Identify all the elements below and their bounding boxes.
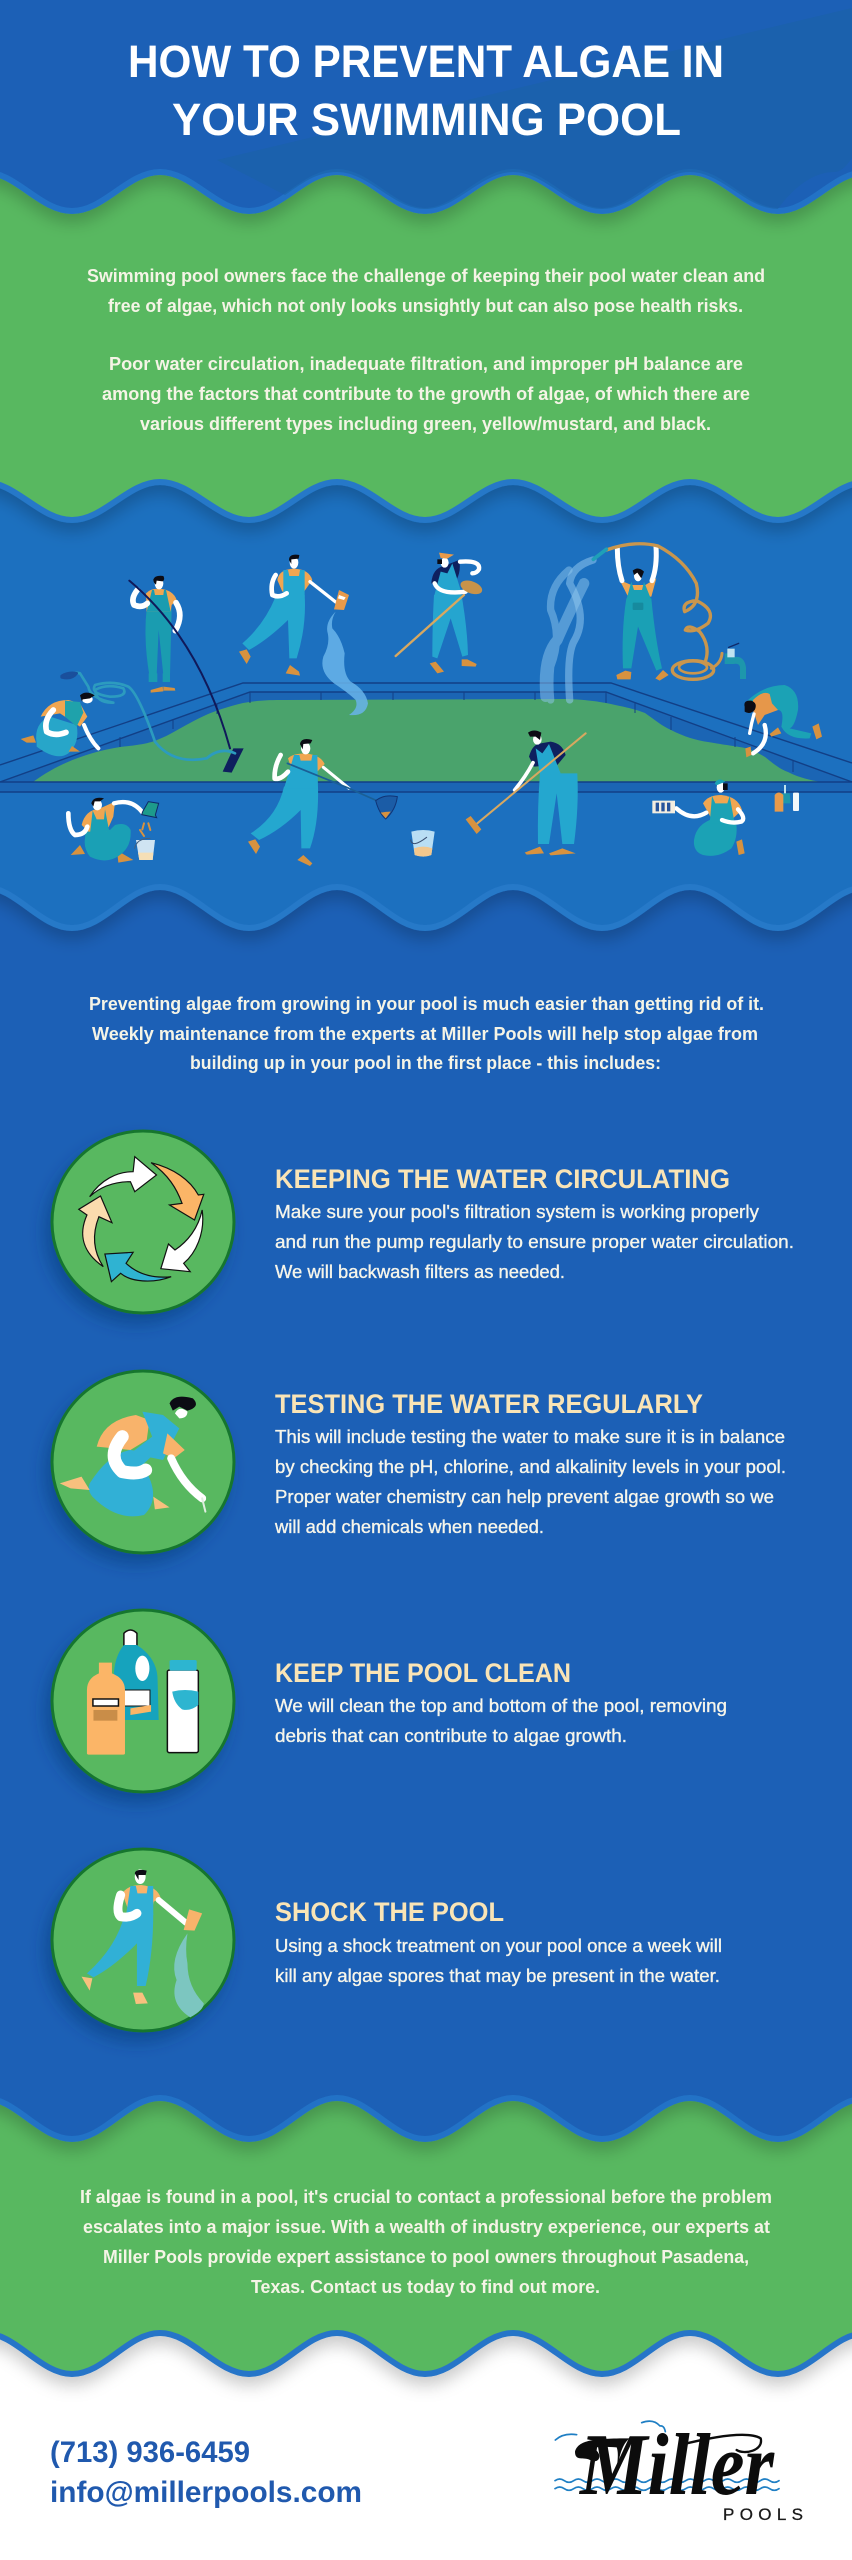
body text: kill any algae spores that may be present in the water.: [275, 1966, 720, 1986]
figure: hose man: [593, 544, 746, 681]
panel: main blue section: [0, 848, 852, 2139]
intro text: [87, 266, 765, 434]
body text: will add chemicals when needed.: [274, 1517, 544, 1537]
body text: [274, 1427, 786, 1537]
icon: crouching tester: [52, 1371, 234, 1553]
body text: [275, 1936, 722, 1986]
mid intro text: [89, 994, 764, 1073]
icon: circulating arrows: [52, 1131, 234, 1313]
panel: intro green band: [0, 132, 852, 520]
water plume: [545, 570, 584, 700]
logo: Miller Pools: Miller: [578, 2417, 775, 2514]
closing text: If algae is found in a pool, it's crucial to contact a professional before the problem: [80, 2187, 772, 2207]
heading: TESTING THE WATER REGULARLY: [275, 1389, 703, 1419]
right scene figures: [569, 544, 822, 856]
contact details: info@millerpools.com: [50, 2476, 362, 2509]
step: keeping the water circulating: [52, 1131, 794, 1313]
closing text: [80, 2187, 772, 2297]
header diagonal shade: [217, 8, 852, 209]
contact details: (713) 936-6459: [50, 2436, 250, 2469]
body text: and run the pump regularly to ensure proper water circulation.: [275, 1232, 794, 1252]
step: testing the water regularly: [52, 1371, 786, 1553]
intro text: Poor water circulation, inadequate filtration, and improper pH balance are: [109, 354, 743, 374]
body text: debris that can contribute to algae growth.: [275, 1726, 627, 1746]
mid intro text: Preventing algae from growing in your pool is much easier than getting rid of it.: [89, 994, 764, 1014]
figure: kneeling man with test kit: [652, 780, 745, 856]
figure: skimmer emptying net: [68, 798, 159, 863]
logo: Miller Pools: POOLS: [723, 2505, 803, 2524]
contact details: [50, 2436, 362, 2509]
body text: Using a shock treatment on your pool once a week will: [275, 1936, 722, 1956]
body text: This will include testing the water to make sure it is in balance: [275, 1427, 785, 1447]
pool water interior: [0, 692, 852, 792]
step: shock the pool: [52, 1849, 722, 2031]
pool green water: [33, 699, 821, 782]
body text: [275, 1202, 794, 1282]
heading: SHOCK THE POOL: [275, 1897, 504, 1927]
centre scene figures: [239, 553, 586, 866]
closing text: escalates into a major issue. With a wealth of industry experience, our experts at: [83, 2217, 770, 2237]
panel: pool scene background: [0, 447, 852, 928]
body text: by checking the pH, chlorine, and alkalinity levels in your pool.: [275, 1457, 786, 1477]
pool illustration: [0, 544, 852, 866]
figure: brush man: [396, 553, 484, 673]
figure: mop man: [466, 730, 586, 855]
intro text: Swimming pool owners face the challenge of keeping their pool water clean and: [87, 266, 765, 286]
figure: man with pole: [129, 576, 244, 773]
figure: bending man: [744, 685, 822, 757]
step: keep the pool clean: [52, 1610, 727, 1792]
icon: small chemical bottles: [775, 785, 799, 812]
body text: We will backwash filters as needed.: [275, 1262, 565, 1282]
title: YOUR SWIMMING POOL: [172, 94, 681, 145]
intro text: among the factors that contribute to the growth of algae, of which there are: [102, 384, 750, 404]
title: [128, 36, 724, 145]
pool outline rails: [0, 683, 852, 792]
body text: Make sure your pool's filtration system is working properly: [275, 1202, 759, 1222]
panel: closing green band: [0, 2073, 852, 2374]
icon: bucket: [411, 830, 435, 857]
closing text: Miller Pools provide expert assistance to pool owners throughout Pasadena,: [103, 2247, 749, 2267]
intro text: free of algae, which not only looks unsightly but can also pose health risks.: [108, 296, 743, 316]
title: HOW TO PREVENT ALGAE IN: [128, 36, 724, 87]
heading: KEEPING THE WATER CIRCULATING: [275, 1164, 730, 1194]
figure: walking man with shock box: [239, 555, 368, 715]
icon: man pouring shock: [52, 1849, 234, 2031]
left scene figures: [21, 576, 244, 863]
heading: KEEP THE POOL CLEAN: [275, 1658, 571, 1688]
mid intro text: Weekly maintenance from the experts at Miller Pools will help stop algae from: [92, 1024, 758, 1044]
intro text: various different types including green, yellow/mustard, and black.: [140, 414, 711, 434]
body text: Proper water chemistry can help prevent algae growth so we: [275, 1487, 774, 1507]
panel: title header band: [0, 0, 852, 211]
icon: chemical bottles: [52, 1610, 234, 1792]
water plume upper: [569, 560, 593, 700]
body text: We will clean the top and bottom of the pool, removing: [275, 1696, 727, 1716]
mid intro text: building up in your pool in the first place - this includes:: [190, 1053, 661, 1073]
figure: crouching tester: [21, 693, 98, 756]
figure: hose cleaner hose: [62, 673, 235, 760]
figure: net man: [248, 739, 397, 866]
closing text: Texas. Contact us today to find out more.: [251, 2277, 600, 2297]
body text: [275, 1696, 727, 1746]
